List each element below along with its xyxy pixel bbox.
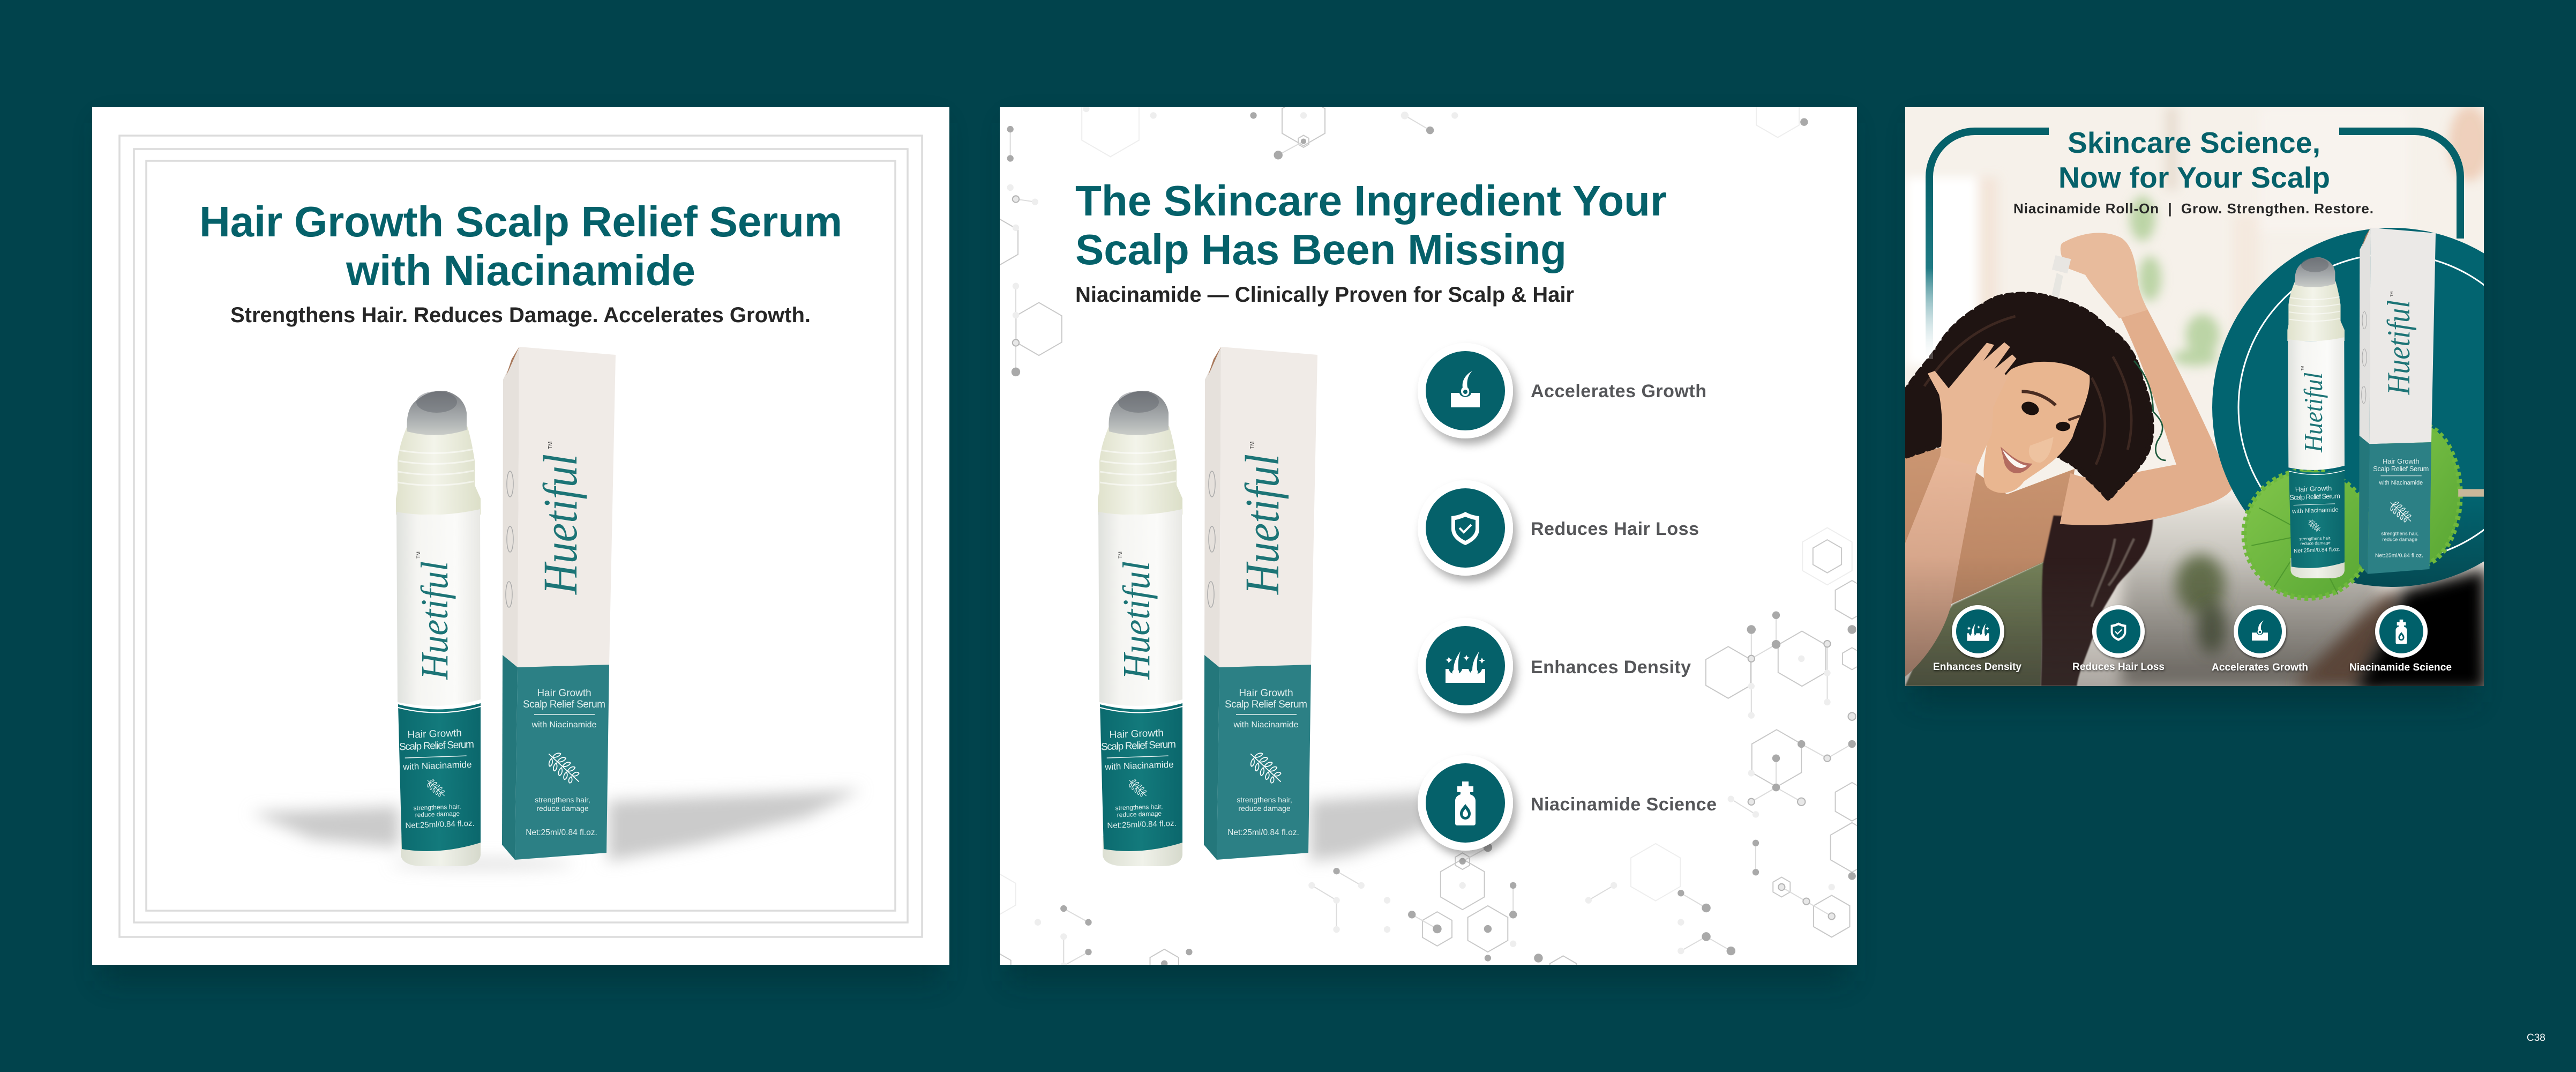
heading: The Skincare Ingredient Your [1075, 177, 1667, 225]
label text: reduce damage [1117, 810, 1162, 819]
curly strands [2134, 361, 2166, 460]
icon: hair follicle [2236, 607, 2284, 656]
label: Accelerates Growth [2212, 662, 2308, 673]
box: with Niacinamide [1233, 720, 1299, 729]
label text: Hair Growth [2295, 484, 2332, 493]
blurred room background [1906, 106, 2490, 686]
box: Net:25ml/0.84 fl.oz. [2375, 553, 2423, 559]
benefit: accelerates growth [2212, 607, 2308, 673]
product circle backdrop [2212, 228, 2571, 587]
panel drop shadows [102, 123, 2474, 981]
box: reduce damage [536, 804, 589, 813]
icon: shield [2094, 607, 2143, 656]
label text: strengthens hair, [413, 803, 461, 812]
molecule pattern background [975, 88, 1874, 987]
label text: Net:25ml/0.84 fl.oz. [1107, 819, 1177, 830]
lower hair [2041, 516, 2153, 686]
box: strengthens hair, [1237, 795, 1292, 804]
label text: Scalp Relief Serum [1101, 739, 1176, 753]
raised arm [2060, 308, 2233, 525]
benefit: niacinamide science [1418, 755, 1717, 851]
logo: Huetiful [1236, 454, 1289, 595]
box: Scalp Relief Serum [523, 699, 605, 710]
box [2359, 228, 2436, 574]
label text: Scalp Relief Serum [2289, 492, 2340, 502]
product: roll-on bottle and box [396, 347, 616, 866]
label text: Hair Growth [407, 727, 462, 741]
panel: skincare ingredient benefits [975, 88, 1874, 987]
label text [2289, 484, 2342, 554]
label text: Net:25ml/0.84 fl.oz. [405, 819, 475, 830]
heading: Hair Growth Scalp Relief Serum [199, 198, 842, 245]
panel: lifestyle photo ad [1905, 107, 2484, 686]
label text: Net:25ml/0.84 fl.oz. [2294, 547, 2340, 554]
logo: Huetiful [534, 454, 587, 595]
label: Enhances Density [1933, 661, 2021, 673]
dropper [2045, 255, 2071, 330]
benefit: accelerates growth [1418, 343, 1706, 438]
logo: Huetiful [1115, 561, 1158, 680]
heading line two: Now for Your Scalp [2058, 161, 2330, 194]
subheading: Niacinamide Roll-On | Grow. Strengthen. Restore. [2013, 200, 2373, 217]
bottle: TM [1118, 552, 1123, 559]
logo: Huetiful [413, 561, 456, 680]
icon: dense hair [1418, 618, 1513, 713]
box: Scalp Relief Serum [1225, 699, 1307, 710]
label text [1100, 727, 1179, 830]
label: Reduces Hair Loss [1531, 519, 1699, 539]
darkened lower foreground [1905, 557, 2486, 691]
heading: Skincare Science, [2068, 126, 2320, 159]
logo: Huetiful [2299, 373, 2328, 453]
bottle [1098, 391, 1182, 866]
product: roll-on bottle and box [1098, 347, 1317, 866]
label: Enhances Density [1531, 657, 1691, 678]
benefit: reduces hair loss [1418, 480, 1699, 576]
benefit: niacinamide science [2349, 607, 2452, 673]
heading line two: with Niacinamide [346, 247, 695, 294]
label: Reduces Hair Loss [2072, 661, 2165, 673]
box text: Hair Growth [537, 688, 591, 699]
logo: Huetiful [2381, 300, 2417, 395]
box: Net:25ml/0.84 fl.oz. [526, 828, 597, 837]
label text: with Niacinamide [402, 760, 472, 772]
raised hand [2061, 233, 2148, 318]
label text: reduce damage [2300, 540, 2331, 546]
benefit: reduces hair loss [2072, 607, 2165, 673]
label text: Hair Growth [1109, 727, 1164, 741]
icon: dropper bottle [1418, 755, 1513, 851]
label text: strengthens hair, [1115, 803, 1163, 812]
bottle [2287, 257, 2345, 578]
triple line frame [119, 136, 922, 937]
benefit: enhances density [1933, 607, 2021, 673]
icon: hair follicle [1418, 343, 1513, 438]
mint leaves [2244, 423, 2484, 598]
icon: dropper bottle [2377, 607, 2425, 656]
product shadow [251, 790, 862, 869]
hair [1905, 294, 2152, 498]
page code label: C38 [2527, 1032, 2545, 1044]
label text: reduce damage [415, 810, 460, 819]
brows, eyes and smile [2001, 391, 2080, 473]
box [1204, 347, 1317, 860]
label text: with Niacinamide [2292, 507, 2339, 515]
box: Scalp Relief Serum [2373, 465, 2429, 473]
benefit: enhances density [1418, 618, 1691, 713]
label: Accelerates Growth [1531, 381, 1706, 401]
box: TM [548, 442, 553, 449]
box: with Niacinamide [2378, 480, 2423, 486]
box text: Hair Growth [2383, 457, 2419, 465]
rounded title frame left [1929, 131, 2049, 359]
hair highlights [1924, 316, 2131, 465]
box: strengthens hair, [535, 795, 590, 804]
box: TM [2390, 292, 2394, 297]
product shadow [1310, 792, 1436, 861]
box: reduce damage [1238, 804, 1291, 813]
bottle: TM [416, 552, 421, 559]
bottle [396, 391, 481, 866]
box: strengthens hair, [2381, 531, 2418, 537]
icon: shield [1418, 480, 1513, 576]
bottle: TM [2302, 366, 2305, 370]
subheading: Strengthens Hair. Reduces Damage. Accelerates Growth. [230, 303, 811, 327]
box: with Niacinamide [531, 720, 597, 729]
heading line two: Scalp Has Been Missing [1075, 226, 1567, 273]
box: Net:25ml/0.84 fl.oz. [1227, 828, 1299, 837]
label text [399, 727, 477, 830]
label: Niacinamide Science [1531, 794, 1717, 815]
torso [1905, 448, 2075, 604]
woman applying serum [1905, 233, 2233, 686]
forearm [1905, 456, 1977, 676]
label text: Scalp Relief Serum [399, 739, 474, 753]
icon: dense hair [1954, 607, 2002, 656]
rounded title frame right [2339, 131, 2460, 239]
box: reduce damage [2382, 537, 2417, 542]
product: roll-on bottle and box [2287, 228, 2436, 578]
face [1983, 362, 2090, 493]
subheading: Niacinamide — Clinically Proven for Scalp & Hair [1075, 283, 1574, 307]
label text: strengthens hair, [2299, 535, 2331, 541]
hand in hair [1928, 343, 2017, 469]
label text: with Niacinamide [1104, 760, 1174, 772]
label: Niacinamide Science [2349, 662, 2452, 673]
panel: product hero [92, 107, 949, 965]
box text: Hair Growth [1239, 688, 1293, 699]
towel [1905, 561, 2047, 686]
box: TM [1249, 442, 1255, 449]
box [502, 347, 616, 860]
